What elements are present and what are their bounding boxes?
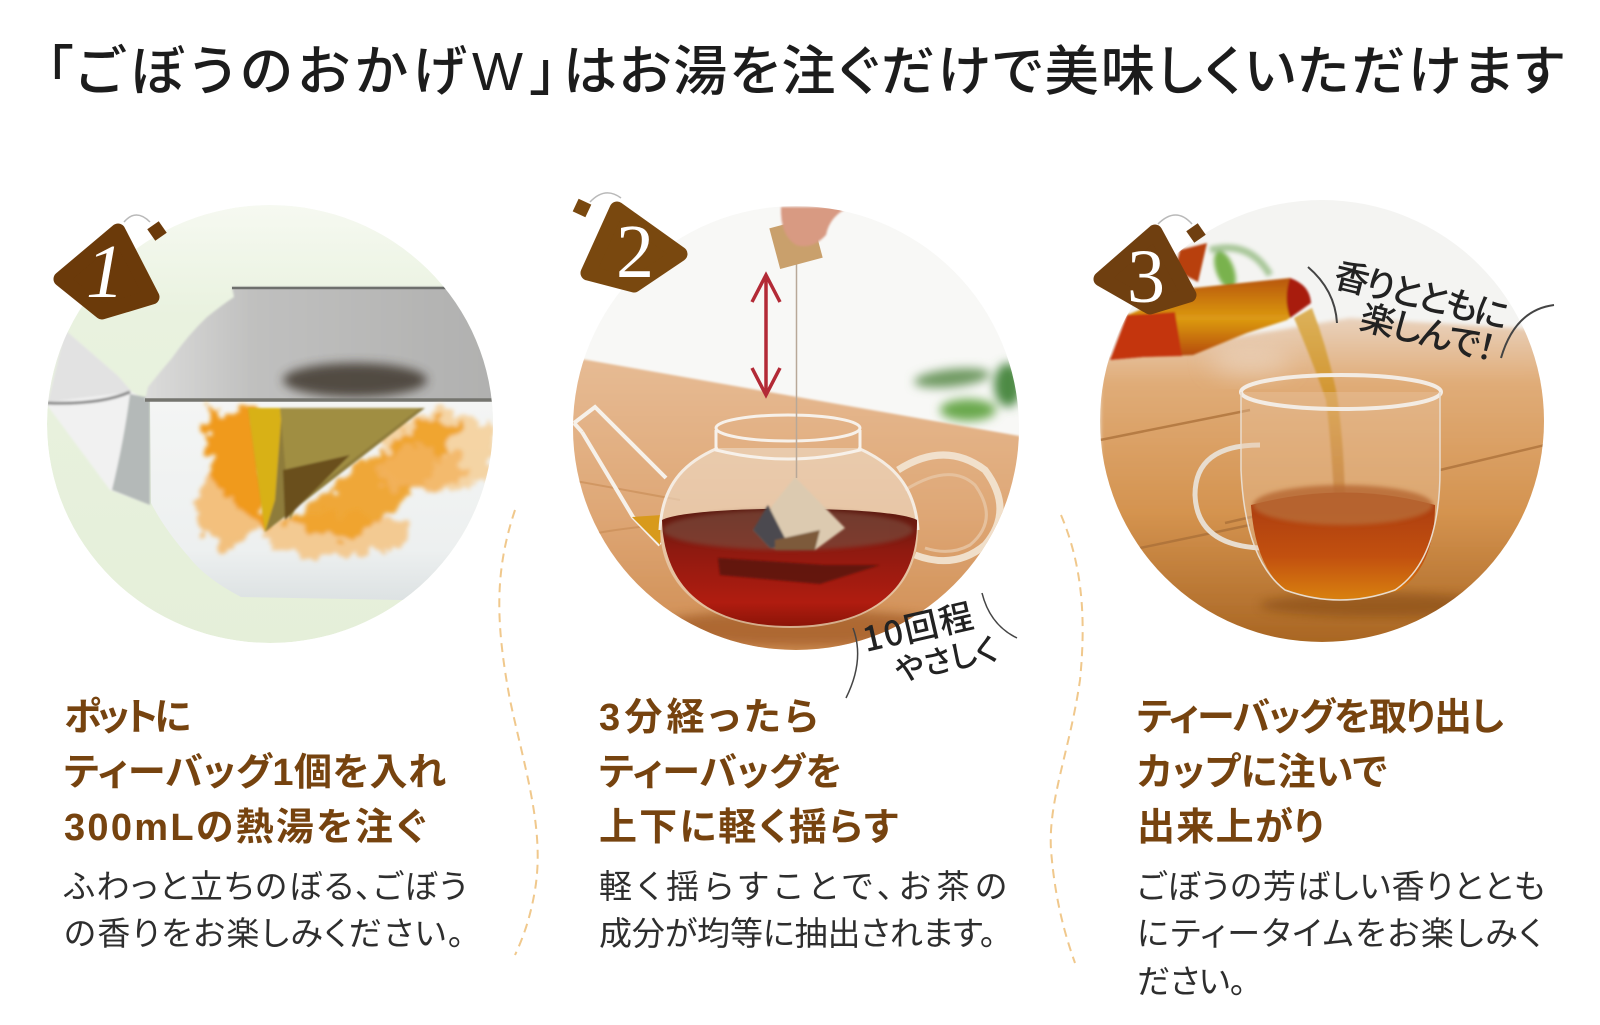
plant bbox=[1210, 248, 1270, 292]
tea in pot bbox=[662, 509, 917, 626]
step 2 body: 軽く揺らすことで、お茶の bbox=[599, 868, 1007, 905]
icon: step 3 tea-bag tag bbox=[1101, 215, 1206, 319]
step 1 heading: ティーバッグ1個を入れ bbox=[64, 752, 446, 794]
fingers bbox=[781, 207, 850, 246]
callout: 10 times gently: 10回程 bbox=[857, 589, 977, 662]
table plank lines bbox=[1100, 410, 1545, 548]
teapot spout bbox=[47, 330, 150, 505]
spout tea bbox=[632, 515, 662, 545]
string bbox=[796, 263, 798, 478]
step 1 heading bbox=[64, 697, 446, 849]
step 1 heading: 300mLの熱湯を注ぐ bbox=[64, 807, 426, 849]
step 3 body bbox=[1137, 868, 1545, 1000]
step 3 body: ごぼうの芳ばしい香りととも bbox=[1137, 868, 1545, 905]
rim of pot bbox=[232, 287, 460, 289]
icon: step 2 tea-bag tag: 2 bbox=[616, 210, 654, 294]
table plank lines bbox=[579, 480, 680, 534]
callout: 10 times gently bbox=[846, 589, 1017, 698]
step 3 body: ださい。 bbox=[1137, 963, 1246, 1000]
cup glass bbox=[1241, 392, 1440, 600]
plant bbox=[913, 363, 1022, 421]
tea bag in water bbox=[248, 408, 425, 532]
divider 1 bbox=[499, 510, 538, 955]
tea in cup bbox=[1251, 492, 1435, 599]
title: はお湯を注ぐだけで美味しくいただけます bbox=[563, 42, 1564, 102]
step 1 heading: ポットに bbox=[64, 697, 191, 739]
step 1 body: ふわっと立ちのぼる、ごぼう bbox=[63, 868, 467, 905]
tea surface bbox=[663, 510, 913, 550]
panel: step 3 photo bbox=[1095, 195, 1550, 645]
callout: enjoy with the aroma: 楽しんで！ bbox=[1355, 289, 1502, 372]
callout: enjoy with the aroma bbox=[1308, 247, 1554, 372]
title: 」 bbox=[530, 42, 557, 102]
water line bbox=[145, 398, 500, 402]
teapot handle bbox=[898, 455, 1000, 561]
step 3 body: にティータイムをお楽しみく bbox=[1137, 915, 1542, 952]
tea bag bbox=[753, 477, 845, 550]
icon: step 3 tea-bag tag: 3 bbox=[1127, 235, 1165, 319]
step 2 heading: 上下に軽く揺らす bbox=[599, 807, 898, 849]
reflection of bag under water bbox=[718, 558, 880, 584]
teapot bowl with water bbox=[150, 400, 500, 600]
pouring teapot bbox=[1110, 243, 1311, 360]
panel: step 2 photo bbox=[570, 200, 1025, 660]
step 2 heading: 3分経ったら bbox=[599, 697, 818, 739]
teapot spout bbox=[574, 407, 666, 545]
photo background bbox=[1110, 200, 1523, 356]
step 3 heading bbox=[1137, 697, 1504, 849]
text block: step 3 bbox=[1137, 697, 1545, 1000]
tea surface bbox=[1253, 485, 1433, 525]
text block: step 2 bbox=[599, 697, 1007, 952]
double arrow bbox=[752, 275, 780, 395]
paper tag bbox=[769, 224, 823, 269]
title bbox=[46, 42, 1564, 102]
teapot glass body bbox=[660, 448, 918, 628]
cup rim bbox=[1241, 375, 1441, 409]
cup handle bbox=[1195, 445, 1260, 548]
title: 「 bbox=[46, 42, 73, 102]
wooden table bbox=[1100, 318, 1550, 645]
photo background bbox=[584, 207, 1019, 434]
step 1 body bbox=[63, 868, 467, 952]
title: ごぼうのおかげW bbox=[76, 42, 523, 102]
tea stream bbox=[1294, 308, 1345, 515]
callout: 10 times gently: やさしく bbox=[890, 624, 1001, 691]
teapot neck and rim bbox=[716, 415, 860, 459]
step 2 body: 成分が均等に抽出されます。 bbox=[599, 915, 996, 952]
step 3 heading: ティーバッグを取り出し bbox=[1137, 697, 1504, 739]
step 2 body bbox=[599, 868, 1007, 952]
wooden table bbox=[570, 357, 1025, 660]
icon: step 1 tea-bag tag bbox=[61, 215, 167, 314]
step 2 heading: ティーバッグを bbox=[599, 752, 842, 794]
orange infusion cloud bbox=[195, 408, 500, 557]
step 3 heading: カップに注いで bbox=[1137, 752, 1387, 794]
teapot upper dome bbox=[145, 287, 500, 400]
panel: step 1 photo bbox=[47, 205, 500, 643]
step 2 heading bbox=[599, 697, 898, 849]
text block: step 1 bbox=[63, 697, 467, 952]
shadow under cup bbox=[1260, 593, 1500, 617]
steam bbox=[1210, 344, 1290, 376]
step 3 heading: 出来上がり bbox=[1137, 807, 1324, 849]
dark condensation patch bbox=[283, 363, 427, 397]
divider 2 bbox=[1051, 515, 1083, 963]
photo background circle bbox=[47, 205, 443, 643]
icon: step 2 tea-bag tag bbox=[573, 193, 680, 294]
cup outline bbox=[1241, 392, 1440, 600]
icon: step 1 tea-bag tag: 1 bbox=[86, 230, 124, 314]
shadow under pot bbox=[650, 610, 950, 646]
callout: enjoy with the aroma: 香りとともに bbox=[1329, 247, 1514, 340]
step 1 body: の香りをお楽しみください。 bbox=[64, 915, 464, 952]
